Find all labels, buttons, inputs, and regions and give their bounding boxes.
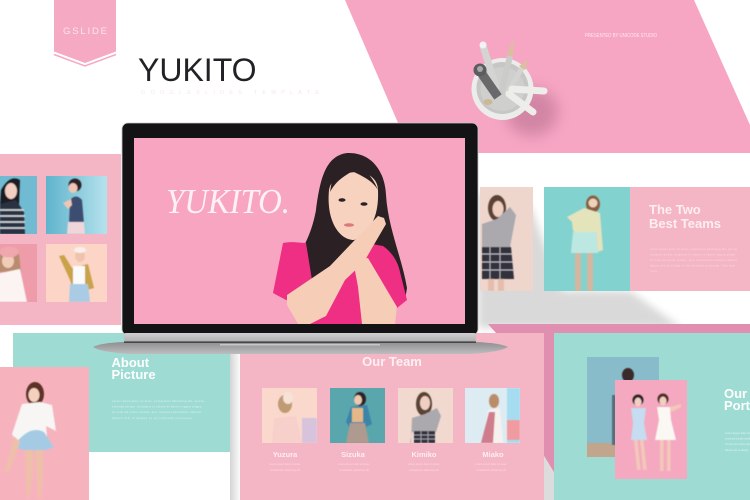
ribbon badge <box>54 0 116 66</box>
screen title: YUKITO. <box>166 182 290 221</box>
body copy: eiusmod tempor incididunt ut labore et dolore magna aliqua. <box>650 252 736 256</box>
body copy <box>112 399 205 420</box>
body copy: eiusmod tempor incididunt ut labore et dolore magna aliqua. <box>112 404 202 408</box>
photo: floral blouse <box>544 187 630 291</box>
laptop mockup <box>93 123 508 354</box>
body copy <box>725 431 750 452</box>
photo: two friends <box>615 380 687 479</box>
team member: Sizuka: consectetur adipiscing elit <box>339 468 369 472</box>
gutter shadow <box>230 333 240 500</box>
panel: two best teams <box>480 187 750 291</box>
model portrait <box>273 153 407 324</box>
pink parallelogram banner <box>345 0 750 153</box>
icon: pencil cup <box>472 41 558 136</box>
body copy: irure. <box>650 269 658 273</box>
body copy: Ut enim ad minim veniam, quis nostrud exercitation ullamco <box>112 410 202 414</box>
team member: Miako: consectetur adipiscing elit <box>476 468 506 472</box>
heading: our portfolio: Our <box>724 386 747 401</box>
photo: pink backdrop <box>0 367 89 500</box>
heading: the two best teams: Best Teams <box>649 216 721 231</box>
team member: Yuzura: Yuzura <box>273 450 298 459</box>
laptop cast shadow <box>478 192 682 328</box>
laptop base <box>93 342 508 354</box>
panel: our team <box>240 333 544 500</box>
team member: Miako: Miako <box>482 450 504 459</box>
panel: about picture <box>0 333 230 500</box>
heading: the two best teams: The Two <box>649 202 701 217</box>
team member: Miako <box>465 388 520 472</box>
body copy: Lorem ipsum dolor sit amet, consectetur adipiscing elit, sed do <box>112 399 205 403</box>
body copy: laboris nisi ut aliquip <box>725 448 749 452</box>
presented by credit: PRESENTED BY UNICODE STUDIO <box>585 33 657 39</box>
heading: about picture: Picture <box>112 367 156 382</box>
heading: about picture: About <box>112 355 150 370</box>
team member: Sizuka: Sizuka <box>341 450 366 459</box>
team member: Yuzura: Lorem ipsum dolor sit amet, <box>269 462 301 466</box>
team member: Yuzura <box>262 388 317 472</box>
team member: Sizuka: Lorem ipsum dolor sit amet, <box>338 462 370 466</box>
body copy: laboris nisi ut aliquip ex ea commodo consequat. Duis aute <box>650 264 736 268</box>
panel: darker pink back slide <box>488 324 750 474</box>
team member: Miako: Lorem ipsum dolor sit amet, <box>475 462 507 466</box>
title: YUKITO <box>138 52 257 88</box>
body copy: Ut enim ad minim veniam, quis nostrud exercitation ullamco <box>650 258 738 262</box>
photo: pink cap <box>0 244 37 302</box>
panel: our portfolio <box>554 333 750 500</box>
laptop hinge <box>124 333 476 342</box>
photo: side profile <box>46 176 107 234</box>
photo: striped top <box>0 176 37 234</box>
body copy <box>650 247 738 273</box>
panel: lookbook left <box>0 154 121 325</box>
team member: Yuzura: consectetur adipiscing elit <box>270 468 300 472</box>
team member: Kimiko: consectetur adipiscing elit <box>409 468 439 472</box>
team member: Kimiko: Lorem ipsum dolor sit amet, <box>408 462 440 466</box>
photo: blue wall <box>587 357 659 457</box>
heading: our team: Our Team <box>362 354 422 369</box>
badge label: GSLIDE <box>63 26 107 37</box>
photo: mustard jacket <box>46 244 107 302</box>
photo: plaid skirt <box>480 187 533 291</box>
corner shadow <box>544 456 555 500</box>
laptop screen <box>134 138 465 324</box>
body copy: laboris nisi ut aliquip ex ea commodo consequat. <box>112 416 193 420</box>
subtitle: GOOGLESLIDES TEMPLATE <box>141 90 319 96</box>
team member: Sizuka <box>330 388 385 472</box>
team member: Kimiko: Kimiko <box>411 450 437 459</box>
body copy: Lorem ipsum dolor sit amet, consectetur adipiscing elit, sed do <box>650 247 738 251</box>
team member: Kimiko <box>398 388 453 472</box>
